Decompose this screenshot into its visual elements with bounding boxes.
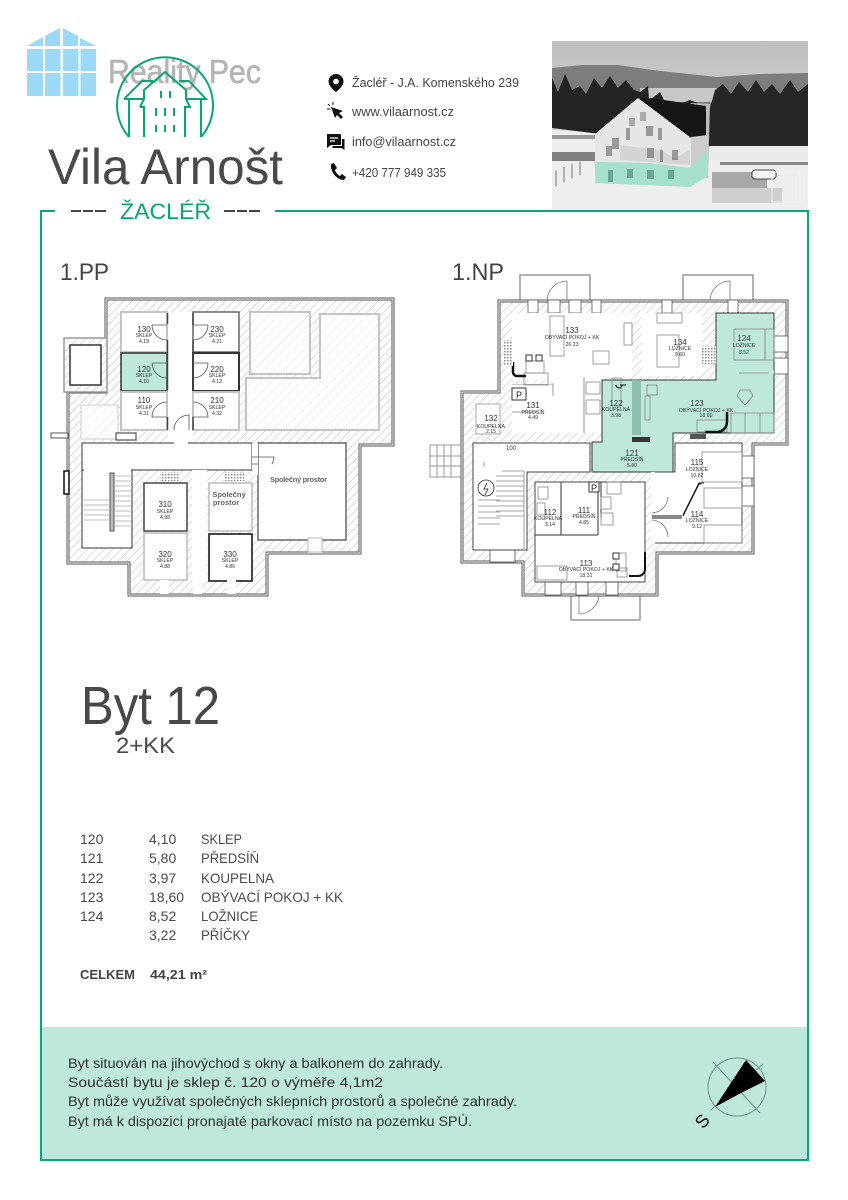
panel: description xyxy=(42,1027,807,1159)
floor plan: 1.PP: 310 xyxy=(158,500,172,509)
area table: KOUPELNA xyxy=(201,870,275,886)
floor plan: 1.NP: PŘEDSÍŇ xyxy=(620,455,644,463)
icon: compass: S xyxy=(691,1110,714,1132)
floor plan: 1.PP: 4.88 xyxy=(160,564,170,570)
floor plan: 1.PP: 110 xyxy=(138,396,151,405)
window openings xyxy=(490,300,788,595)
floor plan: 1.NP: 134 xyxy=(673,338,687,347)
floor plan: 1.NP: 18.31 xyxy=(580,573,593,579)
floor plan: 1.NP: OBÝVACÍ POKOJ + KK xyxy=(545,334,600,341)
icon: phone xyxy=(331,163,346,180)
floor plan: 1.NP: PŘEDSÍŇ xyxy=(572,512,596,520)
floor plan: 1.NP: OBÝVACÍ POKOJ + KK xyxy=(679,407,734,414)
area table: 121 xyxy=(80,850,104,866)
floor plan: 1.NP: 8.52 xyxy=(739,350,749,356)
area table: 3,97 xyxy=(149,870,176,886)
floor plan: 1.PP: SKLEP xyxy=(157,558,174,564)
text: address: Žacléř - J.A. Komenského 239 xyxy=(352,75,519,90)
floor plan: 1.NP: 3.98 xyxy=(611,413,621,419)
description text: Byt má k dispozici pronajaté parkovací místo na pozemku SPÚ. xyxy=(68,1114,472,1129)
floor plan: 1.PP: 230 xyxy=(210,325,224,334)
floor plan: 1.NP: 111 xyxy=(578,506,591,515)
description text: Součástí bytu je sklep č. 120 o výměře 4,1m2 xyxy=(68,1075,383,1090)
floor plan: 1.PP: 4.32 xyxy=(212,411,222,417)
floor plan: 1.PP: 220 xyxy=(210,365,224,374)
outside stairs xyxy=(430,445,462,477)
text: e-mail: info@vilaarnost.cz xyxy=(352,135,456,149)
floor plan: 1.NP: 9.12 xyxy=(692,524,702,530)
floor plan: 1.PP: 4.98 xyxy=(160,515,170,521)
floor plan: 1.NP: P xyxy=(591,483,597,493)
floor plan: 1.NP: LOŽNICE xyxy=(686,516,709,524)
floor plan: 1.NP: 9.60 xyxy=(675,352,685,358)
floor plan: 1.PP: 330 xyxy=(223,550,237,559)
text: phone: +420 777 949 335 xyxy=(352,166,446,180)
floor plan: 1.NP: 123 xyxy=(690,399,704,408)
area table: PŘEDSÍŇ xyxy=(201,850,259,866)
floor plan: 1.NP: 114 xyxy=(691,510,704,519)
logo: Reality Pec house xyxy=(27,28,96,96)
area table: SKLEP xyxy=(201,831,242,847)
icon: chat bubbles xyxy=(327,134,344,150)
floor plan: 1.NP: 131 xyxy=(526,401,540,410)
furniture xyxy=(478,313,774,580)
subheading: 2+KK: 2+KK xyxy=(116,733,175,758)
floor plan: 1.PP: 320 xyxy=(158,550,172,559)
floor plan: 1.PP: SKLEP xyxy=(209,405,226,411)
corridor and rooms upper xyxy=(168,312,193,443)
area table: 122 xyxy=(80,870,104,886)
icon: cursor click xyxy=(327,102,343,119)
floor plan: 1.NP: LOŽNICE xyxy=(669,344,692,352)
area table: 5,80 xyxy=(149,850,176,866)
floor plan: 1.PP: SKLEP xyxy=(209,373,226,379)
floor plan: 1.NP: 4.49 xyxy=(528,415,538,421)
room 133 xyxy=(512,313,632,433)
floor plan: 1.PP: SKLEP xyxy=(136,373,153,379)
area table: 123 xyxy=(80,889,104,905)
floor plan: 1.PP: SKLEP xyxy=(136,405,153,411)
floor plan: 1.PP: SKLEP xyxy=(136,333,153,339)
icon: location pin xyxy=(328,74,344,92)
floor plan: 1.NP: 18.60 xyxy=(700,413,713,419)
room labels: 130 xyxy=(137,325,151,334)
floor plan: 1.PP: Společný prostor xyxy=(270,475,327,484)
area table: PŘÍČKY xyxy=(201,927,251,943)
description text: Byt situován na jihovýchod s okny a balkonem do zahrady. xyxy=(68,1056,443,1071)
text: website: www.vilaarnost.cz xyxy=(351,105,454,119)
floor plan: 1.NP: LOŽNICE xyxy=(686,465,709,473)
floor plan: 1.NP: 4.85 xyxy=(579,520,589,526)
floor plan: 1.NP: 3.14 xyxy=(545,522,555,528)
apartment 12 highlight xyxy=(592,313,774,472)
floor plan: 1.NP: P xyxy=(516,390,522,400)
floor plan: 1.PP: Společný xyxy=(212,490,247,499)
description text xyxy=(68,1056,517,1129)
area table: OBÝVACÍ POKOJ + KK xyxy=(201,889,344,905)
floor plan: 1.NP: 2.15 xyxy=(486,429,496,435)
floor plan: 1.PP: prostor xyxy=(213,498,239,507)
floor plan: 1.NP: 124 xyxy=(737,334,751,343)
building outline xyxy=(462,301,787,595)
floor plan: 1.PP: SKLEP xyxy=(222,558,239,564)
wall between 133 and 131 xyxy=(512,377,584,433)
floor plan: 1.NP: 132 xyxy=(484,414,498,423)
contact block xyxy=(327,74,519,180)
floor plan: 1.NP: 121 xyxy=(625,449,639,458)
floor plan: 1.PP: SKLEP xyxy=(157,509,174,515)
total: CELKEM xyxy=(80,967,135,982)
lower hall and rooms xyxy=(82,443,252,470)
balconies xyxy=(520,275,753,620)
area table: 120 xyxy=(80,831,104,847)
floor plan: 1.NP: KOUPELNA xyxy=(534,516,563,522)
heading: Byt 12: Byt 12 xyxy=(81,676,220,736)
floor plan: 1.PP: 4.12 xyxy=(212,379,222,385)
floor plan: 1.NP xyxy=(430,275,788,620)
room labels: 133 xyxy=(565,326,579,335)
area table: 18,60 xyxy=(149,889,184,905)
rooms 114 115 xyxy=(652,443,742,543)
subtitle: Žacléř with dashes: ŽACLÉŘ xyxy=(120,199,211,224)
hall 100 xyxy=(473,443,590,550)
floor plan: 1.NP: 122 xyxy=(609,399,623,408)
floor plan: 1.PP: 4.21 xyxy=(212,339,222,345)
logo: Reality Pec text: Reality Pec xyxy=(108,53,261,90)
kitchen counters xyxy=(513,362,526,376)
total: 44,21 m² xyxy=(150,967,208,982)
icon: compass xyxy=(691,1058,766,1132)
area table: 8,52 xyxy=(149,908,176,924)
floor plan: 1.NP: 112 xyxy=(544,508,557,517)
description text: Byt může využívat společných sklepních prostorů a společné zahrady. xyxy=(68,1094,517,1109)
floor plan: 1.PP: 210 xyxy=(210,396,224,405)
total xyxy=(80,967,208,982)
room 134 xyxy=(642,313,702,376)
heading: 1.NP: 1.NP xyxy=(452,259,504,286)
area table: LOŽNICE xyxy=(201,908,258,924)
floor plan: 1.NP: KOUPELNA xyxy=(477,424,506,430)
floor plan: 1.PP: 4.31 xyxy=(139,411,149,417)
logo: Vila Arnošt emblem xyxy=(117,57,213,137)
floor plan: 1.NP: 113 xyxy=(580,559,593,568)
floor plan: 1.NP: KOUPELNA xyxy=(602,407,631,413)
area table xyxy=(80,831,344,943)
floor plan: 1.NP: PŘEDSÍŇ xyxy=(521,408,545,416)
floor plan: 1.NP: 115 xyxy=(691,458,704,467)
floor plan: 1.NP: 26.23 xyxy=(566,342,579,348)
area table: 3,22 xyxy=(149,927,176,943)
area table: 4,10 xyxy=(149,831,176,847)
heading: 1.PP: 1.PP xyxy=(60,259,109,286)
floor plan: 1.PP: 120 xyxy=(137,365,151,374)
floor plan: 1.NP: LOŽNICE xyxy=(733,341,756,349)
room 132 xyxy=(476,404,500,434)
floor plan: 1.NP: 5.80 xyxy=(627,463,637,469)
floor plan: 1.NP: 100 xyxy=(506,446,517,452)
rooms 111 112 113 xyxy=(535,482,645,582)
floor plan: 1.PP: 4.86 xyxy=(225,564,235,570)
frame xyxy=(41,211,808,1160)
floor plan: 1.NP: 10.82 xyxy=(691,473,704,479)
floor plan: 1.PP: SKLEP xyxy=(209,333,226,339)
title: Vila Arnošt: Vila Arnošt xyxy=(48,139,283,195)
photo: building in winter landscape xyxy=(552,41,808,210)
floor plan: 1.NP: OBÝVACÍ POKOJ + KK xyxy=(559,566,614,573)
floor plan: 1.PP xyxy=(51,299,393,595)
area table: 124 xyxy=(80,908,104,924)
floor plan: 1.PP: 4.19 xyxy=(139,339,149,345)
floor plan: 1.PP: 4.10 xyxy=(139,379,149,385)
